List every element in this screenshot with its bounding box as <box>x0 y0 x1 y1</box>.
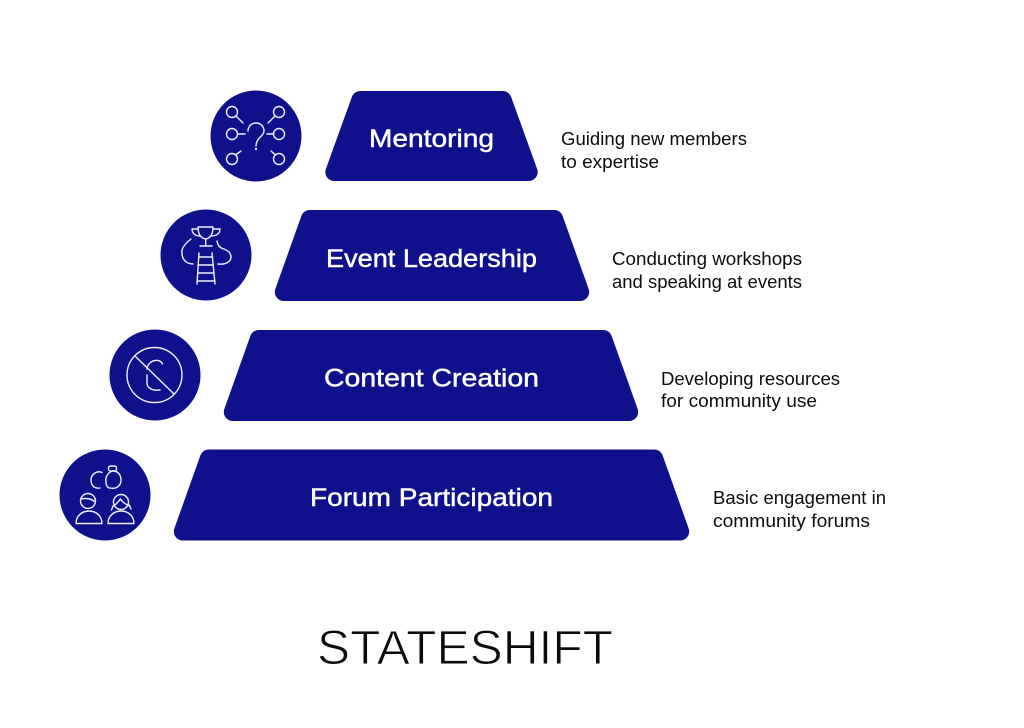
tier: Content Creation <box>110 330 840 420</box>
description: Event Leadership: Conducting workshops <box>612 249 802 269</box>
description: Mentoring <box>561 129 747 172</box>
icon: trophy and ladder <box>160 210 252 300</box>
icon: two people with linked rings <box>60 450 150 540</box>
trapezoid: Mentoring <box>334 100 529 172</box>
trapezoid: Forum Participation <box>183 458 680 532</box>
tier: Mentoring <box>210 90 747 182</box>
trapezoid: Content Creation <box>233 339 629 412</box>
description: Content Creation: for community use <box>661 391 817 411</box>
icon: question with magnifiers <box>210 90 302 182</box>
description: Mentoring: Guiding new members <box>561 129 747 149</box>
label: Forum Participation: Forum Participation <box>310 484 553 512</box>
description: Content Creation: Developing resources <box>661 369 840 389</box>
description: Event Leadership: and speaking at events <box>612 272 802 292</box>
label: Mentoring: Mentoring <box>369 125 494 153</box>
label: Event Leadership: Event Leadership <box>326 245 537 273</box>
icon: crossed-out link <box>110 330 200 420</box>
description: Forum Participation: community forums <box>713 511 870 531</box>
tier: Event Leadership <box>160 210 802 300</box>
label: Content Creation: Content Creation <box>324 364 539 392</box>
trapezoid: Event Leadership <box>284 219 580 292</box>
description: Forum Participation <box>713 488 886 531</box>
tier: Forum Participation <box>60 450 886 540</box>
description: Forum Participation: Basic engagement in <box>713 488 886 508</box>
logo: Stateshift: STATESHIFT <box>317 621 613 675</box>
description: Event Leadership <box>612 249 802 292</box>
description: Content Creation <box>661 369 840 411</box>
description: Mentoring: to expertise <box>561 152 659 172</box>
